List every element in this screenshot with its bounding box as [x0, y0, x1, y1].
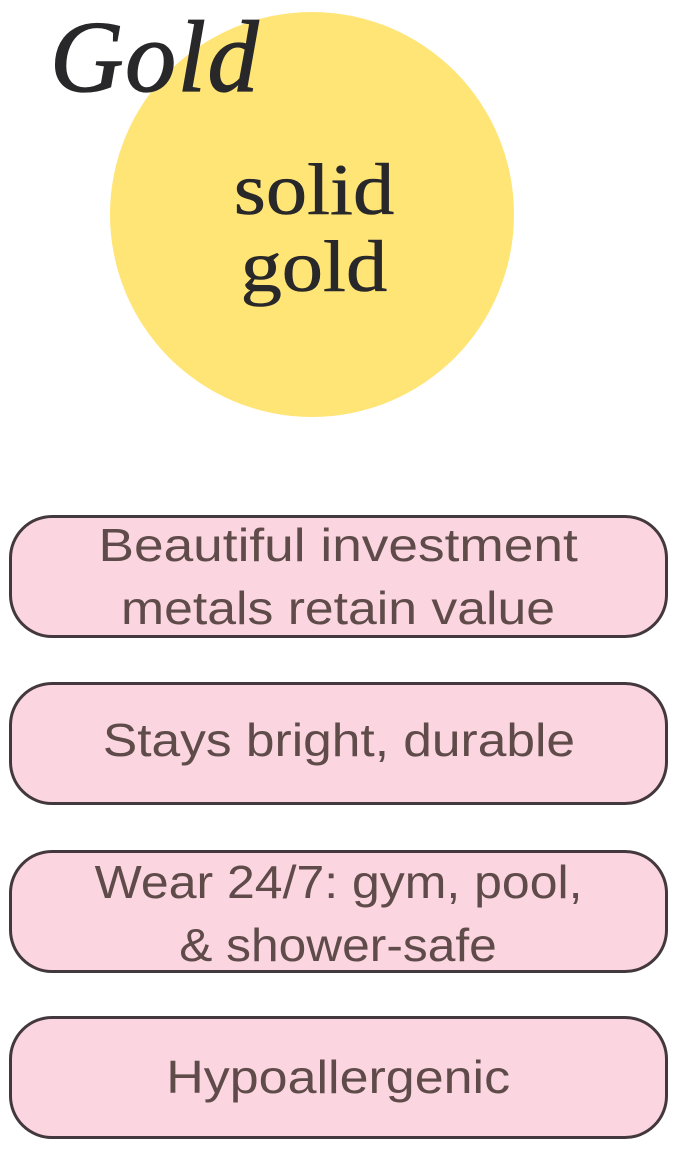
circle label: solid gold: gold	[240, 226, 387, 307]
pill: wear 24/7	[9, 850, 668, 972]
title: Gold: Gold	[50, 1, 260, 114]
yellow circle	[110, 12, 514, 417]
text: Stays bright, durable: Stays bright, durable	[102, 714, 575, 766]
text: metals retain value: metals retain value	[122, 582, 555, 634]
circle label: solid gold	[233, 149, 394, 307]
text: shower-safe: & shower-safe	[180, 918, 497, 970]
pill: hypoallergenic	[9, 1016, 668, 1138]
pill: stays bright	[9, 682, 668, 804]
text: Beautiful investment: Beautiful investment	[99, 518, 578, 570]
text: Wear 24/7: Wear 24/7: gym, pool,	[95, 856, 582, 908]
pill: investment metals	[9, 514, 668, 638]
circle label: solid gold: solid	[233, 149, 394, 230]
text: Hypoallergenic: Hypoallergenic	[167, 1050, 510, 1102]
